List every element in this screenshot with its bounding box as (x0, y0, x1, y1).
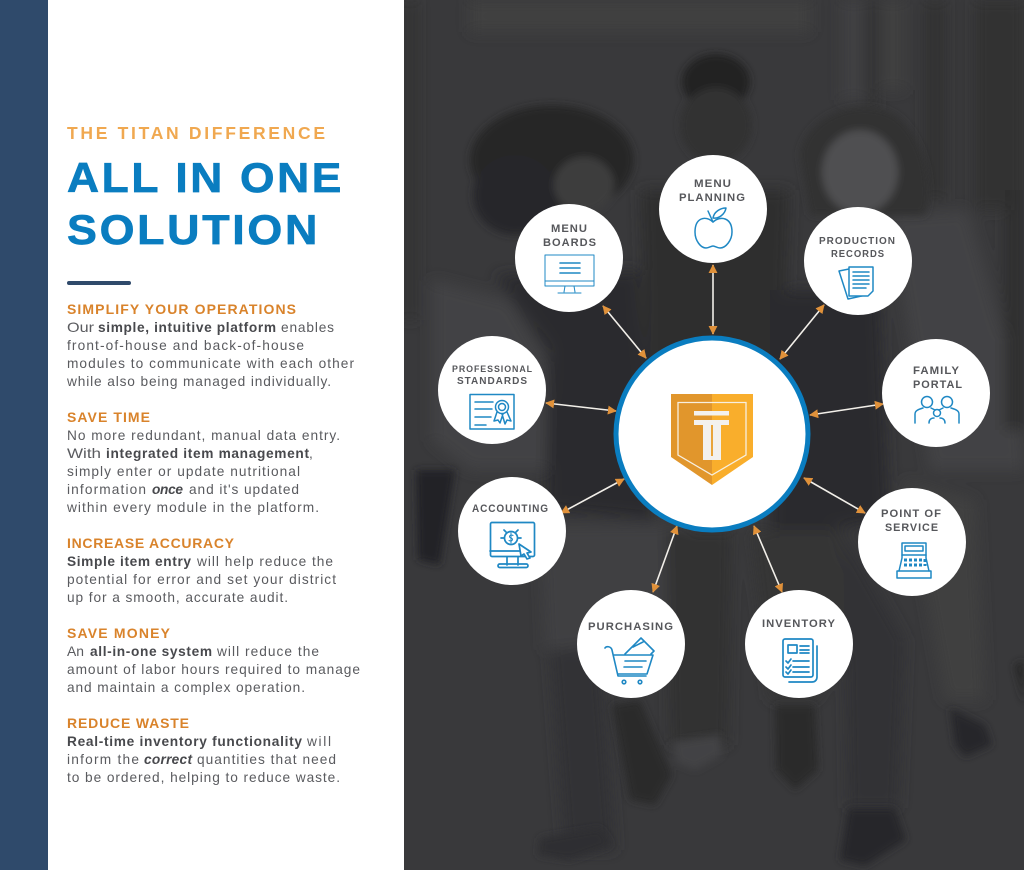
arrow: purchasing (653, 526, 677, 592)
node: inventory (745, 590, 853, 698)
text block: simplify your operations (66, 301, 354, 389)
node: family portal: FAMILY (913, 365, 960, 377)
text block: save time: once (152, 482, 183, 497)
text block: simplify your operations: simple, intuitive platform (98, 320, 276, 335)
icon: monitor with list (545, 255, 594, 293)
text block: save time: information (67, 482, 146, 497)
feet (612, 700, 672, 805)
text block: save money: SAVE MONEY (67, 625, 171, 641)
arrow: menu planning (712, 265, 714, 334)
text block: save time: simply enter or update nutritional (67, 464, 300, 479)
node: menu planning: MENU (694, 178, 732, 190)
text block: reduce waste (67, 715, 340, 785)
icon: shopping cart (605, 638, 654, 684)
text block: simplify your operations: modules to communicate with each other (67, 356, 354, 371)
text block: increase accuracy (67, 535, 336, 605)
text block: reduce waste: quantities that need (197, 752, 336, 767)
right jacket (890, 210, 1024, 470)
central hub (616, 338, 808, 530)
text block: save time: within every module in the platform. (66, 500, 319, 515)
text block: save money: all-in-one system (90, 644, 212, 659)
background photo: children running (404, 0, 1024, 870)
text block: simplify your operations: enables (281, 320, 334, 335)
text block: increase accuracy: will help reduce the (196, 554, 333, 569)
text block: reduce waste: REDUCE WASTE (67, 715, 189, 731)
right child hair and face (800, 107, 929, 215)
node: production records: RECORDS (831, 249, 885, 260)
text block: save time: and it's updated (189, 482, 299, 497)
text block: save time (66, 409, 340, 515)
arrow: production records (780, 305, 824, 359)
node: professional standards: PROFESSIONAL (452, 364, 533, 375)
text block: simplify your operations: front-of-house and back-of-house (67, 338, 304, 353)
icon: cash register (897, 543, 931, 578)
text block: save money: will reduce the (216, 644, 319, 659)
arrow: professional standards (546, 403, 616, 411)
left arm (432, 280, 548, 470)
node: menu planning: PLANNING (679, 192, 746, 204)
node: menu boards: BOARDS (543, 237, 597, 249)
node: professional standards: STANDARDS (457, 376, 528, 387)
node: accounting (458, 477, 566, 585)
node: inventory: INVENTORY (762, 618, 836, 630)
icon: certificate (470, 394, 514, 429)
arrow: menu boards (603, 306, 646, 358)
node: purchasing: PURCHASING (588, 621, 674, 633)
text block: save money (67, 625, 360, 695)
legs (666, 530, 732, 745)
node: accounting: ACCOUNTING (472, 503, 549, 515)
node: menu boards: MENU (551, 223, 588, 235)
text block: simplify your operations: SIMPLIFY YOUR OPERATIONS (67, 301, 296, 317)
main title (67, 154, 344, 253)
node: menu boards (515, 204, 623, 312)
icon: apple (695, 208, 732, 248)
text block: save money: An (67, 644, 84, 659)
arrow: family portal (810, 404, 883, 415)
sidebar stripe (0, 0, 48, 870)
text block: save time: No more redundant, manual data entry. (67, 428, 340, 443)
text block: reduce waste: Real-time inventory functionality (67, 734, 302, 749)
node: professional standards (438, 336, 546, 444)
left child face (554, 157, 614, 213)
node: point of service (858, 488, 966, 596)
title divider (67, 281, 131, 285)
main title: SOLUTION (67, 206, 320, 253)
text block: save money: and maintain a complex operation. (67, 680, 305, 695)
torsos (495, 270, 655, 520)
text block: increase accuracy: Simple item entry (67, 554, 191, 569)
text block: save money: amount of labor hours required to manage (67, 662, 360, 677)
backpack strap left (416, 470, 455, 565)
centre child head (680, 52, 752, 98)
text block: save time: integrated item management (106, 446, 309, 461)
hair of left child (470, 105, 634, 215)
arrow: inventory (754, 526, 782, 592)
text block: increase accuracy: INCREASE ACCURACY (67, 535, 235, 551)
node: point of service: POINT OF (881, 508, 942, 520)
arrow: point of service (804, 478, 865, 513)
node: family portal: PORTAL (913, 379, 963, 391)
node: menu planning (659, 155, 767, 263)
eyebrow heading: THE TITAN DIFFERENCE (67, 123, 325, 143)
icon: monitor with dollar (490, 522, 534, 568)
main title: ALL IN ONE (67, 154, 344, 201)
node: family portal (882, 339, 990, 447)
text block: increase accuracy: potential for error and set your district (67, 572, 336, 587)
logo shield (671, 394, 753, 485)
text block: reduce waste: to be ordered, helping to reduce waste. (67, 770, 340, 785)
icon: stacked papers (839, 267, 873, 299)
text block: save time: SAVE TIME (67, 409, 150, 425)
icon: family (915, 396, 959, 423)
node: production records: PRODUCTION (819, 236, 896, 247)
node: production records (804, 207, 912, 315)
node: purchasing (577, 590, 685, 698)
text block: reduce waste: will (306, 734, 331, 749)
text block: simplify your operations: Our (67, 320, 95, 335)
text block: increase accuracy: up for a smooth, accurate audit. (67, 590, 288, 605)
text block: save time: With (67, 446, 101, 461)
icon: checklist (783, 639, 817, 682)
text block: reduce waste: correct (144, 752, 193, 767)
text block: save time: , (309, 446, 313, 461)
arrow: accounting (561, 479, 624, 513)
text block: reduce waste: inform the (67, 752, 139, 767)
text block: simplify your operations: while also being managed individually. (66, 374, 331, 389)
shorts (540, 525, 690, 650)
node: point of service: SERVICE (885, 522, 939, 534)
